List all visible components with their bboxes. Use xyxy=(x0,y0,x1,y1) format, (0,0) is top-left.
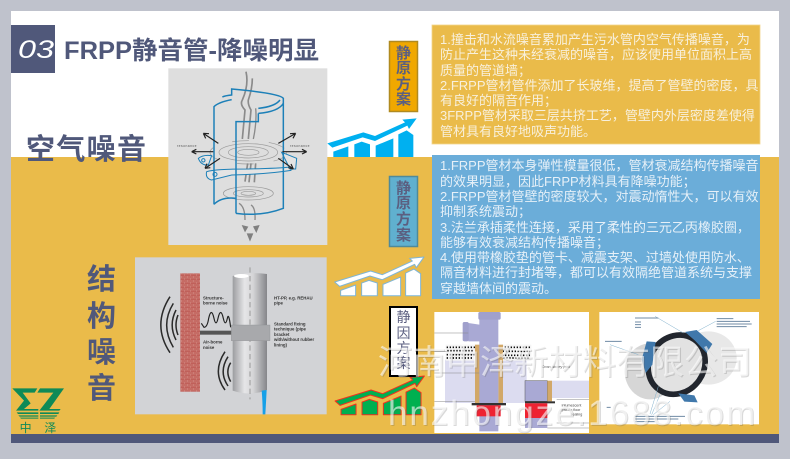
diagram: pipe through floor: Cross-storey joint xyxy=(542,365,571,369)
label: white 静因方案: 因 xyxy=(396,325,410,341)
label: blue 静原方案: 原 xyxy=(396,195,411,212)
diagram: airborne noise through pipe: resonance xyxy=(177,144,197,148)
panel: structure noise solution: 的效果明显，因此FRPP材料具有降噪功能； xyxy=(440,174,696,190)
panel: structure noise solution: 能够有效衰减结构传播噪音； xyxy=(440,235,609,251)
heading: airborne noise: 空气噪音 xyxy=(26,133,146,166)
label: orange 静原方案: 静 xyxy=(396,44,411,62)
vibration wave xyxy=(201,312,231,327)
logo: 中 xyxy=(20,420,32,435)
label: blue 静原方案: 静 xyxy=(396,179,411,197)
label: orange 静原方案: 原 xyxy=(396,60,411,77)
panel: structure noise solution: 3.法兰承插柔性连接，采用了柔性的三元乙丙橡胶圈， xyxy=(440,220,750,235)
clamp xyxy=(198,152,297,180)
labels: Structure- xyxy=(203,295,224,300)
panel: structure noise solution: 抑制系统震动； xyxy=(440,204,531,220)
heading: structure noise: 结 xyxy=(87,263,116,296)
diagram: pipe through floor: pro-do floor xyxy=(562,408,581,412)
diagram: pipe through floor xyxy=(434,312,589,433)
title: FRPP静音管-降噪明显 xyxy=(64,37,319,65)
diagram: airborne noise through pipe: resonance xyxy=(290,144,310,148)
panel: airborne noise solution: 3FRPP管材采取三层共挤工艺，管壁内外层密度差使得 xyxy=(440,108,755,123)
panel: airborne noise solution: 防止产生这种未经衰减的噪音，应该使用单位面积上高 xyxy=(440,47,752,62)
heading: structure noise: 噪 xyxy=(87,337,116,369)
diagram: pipe through floor: intumescent xyxy=(562,404,581,408)
pipe xyxy=(233,273,267,394)
panel: airborne noise solution: 质量的管道墙； xyxy=(440,63,531,79)
labels: technique (pipe xyxy=(274,327,307,332)
label: blue 静原方案: 案 xyxy=(396,226,411,244)
labels: Air-borne xyxy=(203,340,223,345)
sound arcs xyxy=(161,297,231,390)
label: orange 静原方案: 案 xyxy=(396,90,411,108)
panel: structure noise solution: 4.使用带橡胶垫的管卡、减震支架、过墙处使用防水、 xyxy=(440,250,750,265)
panel: structure noise solution: 隔音材料进行封堵等，都可以有效隔绝管道系统与支撑 xyxy=(440,265,752,280)
logo: 泽 xyxy=(44,421,56,435)
labels: Standard fixing xyxy=(274,321,306,326)
heading: structure noise: 构 xyxy=(87,300,116,333)
label: orange 静原方案: 方 xyxy=(396,75,411,93)
logo xyxy=(12,388,64,435)
panel: structure noise solution: 穿越墙体间的震动。 xyxy=(440,281,557,296)
label: blue 静原方案: 方 xyxy=(396,210,411,228)
water xyxy=(262,390,267,414)
brick wall xyxy=(180,273,200,392)
panel: structure noise solution xyxy=(432,155,760,299)
panel: structure noise solution: 2.FRPP管材管壁的密度较大，对震动惰性大，可以有效 xyxy=(440,189,759,204)
label: white 静因方案: 案 xyxy=(396,355,410,371)
chart icon: green rising arrow xyxy=(335,376,424,415)
down arrows xyxy=(242,225,260,242)
heading: structure noise xyxy=(87,263,116,405)
diagram: rubber-lined pipe clamp xyxy=(599,312,759,424)
flow lines xyxy=(239,72,256,220)
labels: pipe xyxy=(274,301,283,306)
label: blue 静原方案 xyxy=(390,176,418,246)
bracket arm xyxy=(200,331,232,335)
section number badge xyxy=(11,25,55,73)
panel: airborne noise solution: 管材具有良好地吸声功能。 xyxy=(440,124,596,139)
labels: borne noise xyxy=(203,301,228,306)
pipe clamp xyxy=(231,325,270,341)
watermark: company name: 河南中泽新材料有限公司 xyxy=(378,344,752,382)
panel: airborne noise solution: 1.撞击和水流噪音累加产生污水管内空气传播噪音，为 xyxy=(440,32,750,47)
labels: bracket xyxy=(274,332,290,337)
labels: lining) xyxy=(274,342,288,347)
labels xyxy=(203,295,314,350)
panel: airborne noise solution: 有良好的隔音作用； xyxy=(440,93,557,109)
heading: structure noise: 音 xyxy=(87,372,116,405)
label: white 静因方案: 方 xyxy=(396,340,410,356)
chart icon: white rising arrow xyxy=(335,257,424,296)
section number badge: 03 xyxy=(18,36,54,64)
panel: structure noise solution: 1.FRPP管材本身弹性模量很低，管材衰减结构传播噪音 xyxy=(440,158,759,173)
grey noise rings xyxy=(210,141,287,200)
label: white 静因方案: 静 xyxy=(396,309,410,325)
diagram: pipe through floor: sealing xyxy=(571,412,582,416)
resonance arrows xyxy=(192,133,307,169)
labels: noise xyxy=(203,345,215,350)
diagram: airborne noise through pipe xyxy=(168,68,327,245)
watermark: website: hnzhongze.1688.com xyxy=(388,394,755,433)
diagram: structure-borne noise xyxy=(135,257,327,414)
label: white 静因方案 xyxy=(390,307,417,376)
chart icon: blue rising arrow xyxy=(327,118,417,157)
labels: with/without rubber xyxy=(273,337,314,342)
panel: airborne noise solution xyxy=(432,25,760,144)
labels: HT-PP, e.g. REHAU xyxy=(274,295,313,300)
label: orange 静原方案 xyxy=(390,42,418,112)
panel: airborne noise solution: 2.FRPP管材管件添加了长玻维，提高了管壁的密度，具 xyxy=(440,78,759,93)
blue pipe shell xyxy=(214,89,283,214)
